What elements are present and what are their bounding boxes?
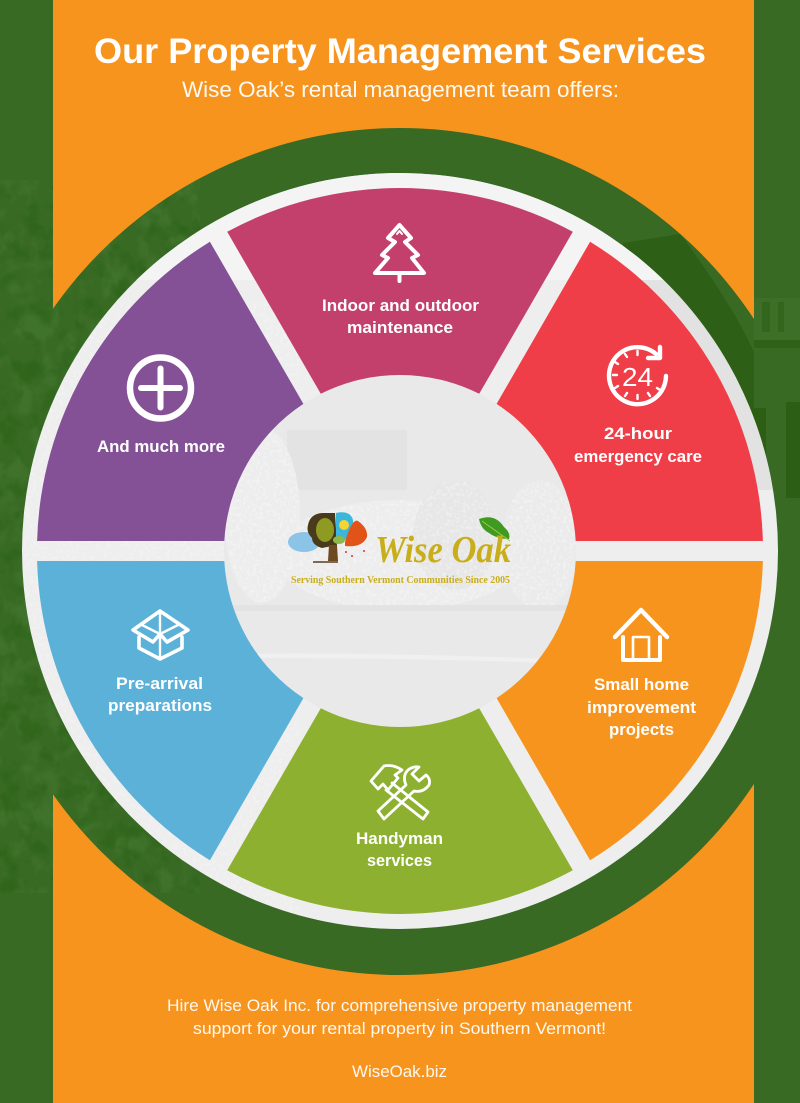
segment shape (227, 708, 573, 914)
segment shape (37, 561, 303, 860)
icon: 24 hour clock: 24 (622, 362, 653, 392)
subtitle: Wise Oak’s rental management team offers: (182, 77, 619, 102)
title: Our Property Management Services (94, 32, 706, 71)
footer text: WiseOak.biz (352, 1062, 447, 1081)
panel: pre-arrival preparations (37, 561, 303, 860)
segment shape (227, 188, 573, 394)
label: services (367, 851, 432, 870)
label: 24-hour (604, 424, 672, 443)
label (356, 829, 443, 870)
label: projects (609, 720, 674, 739)
label: And much more (97, 437, 225, 456)
logo: Wise Oak (288, 512, 511, 586)
footer text (167, 996, 632, 1081)
icon: pine tree (375, 225, 424, 281)
logo tagline: Serving Southern Vermont Communities Since 2005 (291, 574, 510, 586)
segment shape (497, 561, 763, 860)
label (108, 674, 212, 715)
label (574, 424, 702, 466)
label: Small home (594, 675, 689, 694)
segment shape (497, 242, 763, 541)
logo tree (288, 512, 367, 562)
panel: and much more (37, 242, 303, 541)
icon: hammer and wrench (371, 766, 430, 819)
label: maintenance (347, 318, 453, 337)
label: preparations (108, 696, 212, 715)
icon: plus in circle (130, 358, 191, 418)
icon: open box (133, 611, 188, 659)
label: emergency care (574, 447, 702, 466)
label: Pre-arrival (116, 674, 203, 693)
centre photo circle (224, 412, 567, 694)
footer text: support for your rental property in Southern Vermont! (193, 1019, 606, 1038)
photo texture in green bands (0, 180, 800, 893)
label: improvement (587, 698, 696, 717)
icon: 24 hour clock (609, 347, 666, 404)
panel: handyman services (227, 708, 573, 914)
white ring and dividers disc (22, 173, 778, 929)
panel: indoor and outdoor maintenance (227, 188, 573, 394)
label: Handyman (356, 829, 443, 848)
label: Indoor and outdoor (322, 296, 479, 315)
logo leaf (479, 517, 510, 541)
logo wordmark: Wise Oak (375, 529, 511, 571)
icon: house (615, 610, 667, 660)
label (587, 675, 696, 739)
footer text: Hire Wise Oak Inc. for comprehensive property management (167, 996, 632, 1015)
panel: small home improvement projects (497, 561, 763, 860)
label (322, 296, 479, 337)
green circle backdrop (0, 128, 800, 975)
segment shape (37, 242, 303, 541)
panel: 24-hour emergency care (497, 242, 763, 541)
